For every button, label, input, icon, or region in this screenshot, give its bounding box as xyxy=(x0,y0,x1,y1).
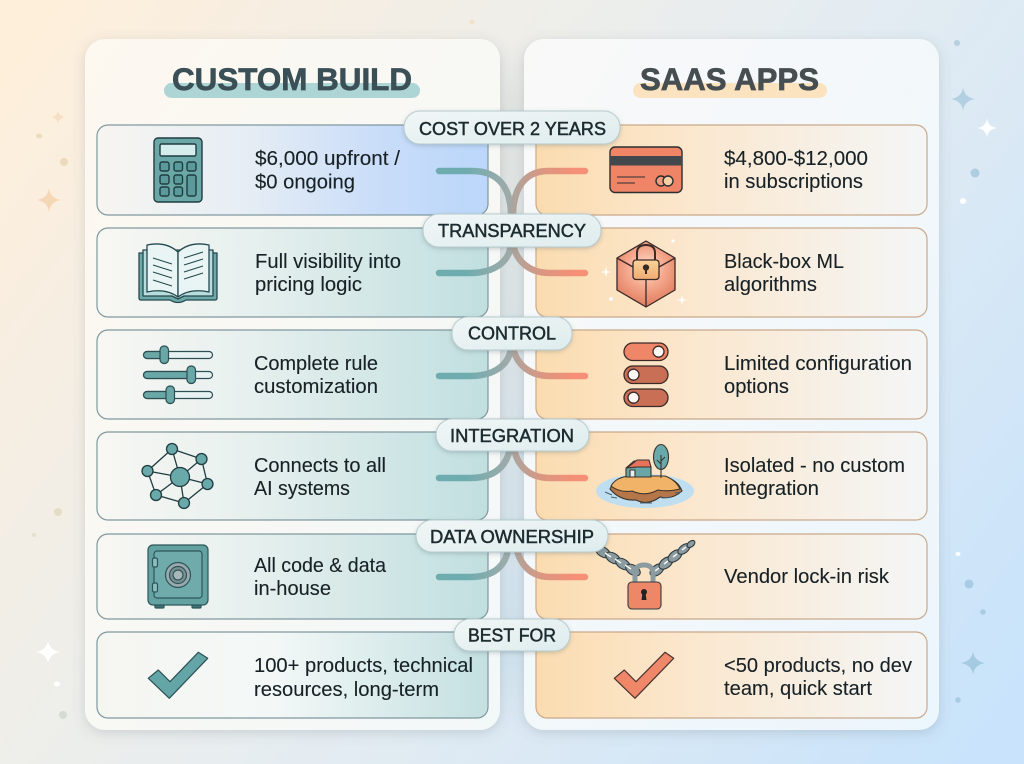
text: control saas: Limited configuration xyxy=(724,352,912,375)
text: integration saas: Isolated - no custom xyxy=(724,454,905,477)
row: control saas xyxy=(536,330,927,419)
text: control custom: Complete rule xyxy=(254,352,378,375)
text: transparency saas: algorithms xyxy=(724,273,817,296)
text: control custom: customization xyxy=(254,375,378,398)
pill: cost over 2 years: COST OVER 2 YEARS xyxy=(419,118,606,139)
pill: cost over 2 years xyxy=(404,111,620,144)
pill: control: CONTROL xyxy=(468,322,556,344)
row: transparency custom xyxy=(97,228,488,317)
text: transparency custom: Full visibility into xyxy=(255,250,401,273)
text: best for saas: team, quick start xyxy=(724,677,872,700)
icon: network xyxy=(142,444,213,508)
text: control saas: options xyxy=(724,375,789,398)
text: integration custom: AI systems xyxy=(254,477,350,500)
centre band xyxy=(498,39,526,730)
icon: teal check xyxy=(148,652,208,698)
pill: data ownership xyxy=(416,520,608,552)
icon: locked black box xyxy=(601,240,687,307)
row: integration saas xyxy=(536,432,927,520)
pill: transparency: TRANSPARENCY xyxy=(438,220,586,241)
text: data ownership saas: Vendor lock-in risk xyxy=(724,565,890,588)
pill: integration: INTEGRATION xyxy=(450,425,574,446)
text: best for custom: 100+ products, technical xyxy=(254,654,473,677)
text: integration saas: integration xyxy=(724,477,819,500)
row: integration custom xyxy=(97,432,488,520)
pill: data ownership: DATA OWNERSHIP xyxy=(430,526,594,547)
row: data ownership custom xyxy=(97,534,488,619)
panel: saas apps xyxy=(524,39,939,730)
heading: saas apps: SAAS APPS xyxy=(640,61,819,97)
pill: best for: BEST FOR xyxy=(468,624,556,646)
row: control custom xyxy=(97,330,488,419)
text: transparency custom: pricing logic xyxy=(255,273,362,296)
icon: sliders xyxy=(144,346,212,404)
row: cost custom xyxy=(97,125,488,215)
pill: control xyxy=(452,317,572,350)
row: best for custom xyxy=(97,632,488,718)
icon: safe xyxy=(148,545,208,608)
text: best for custom: resources, long-term xyxy=(254,678,439,701)
icon: coral check xyxy=(614,652,674,698)
text: cost custom: $6,000 upfront / xyxy=(255,147,400,170)
panel: custom build xyxy=(85,39,500,730)
icon: toggles xyxy=(624,343,668,406)
text: integration custom: Connects to all xyxy=(254,454,386,477)
text: data ownership custom: All code & data xyxy=(254,554,387,577)
icon: calculator xyxy=(154,138,202,202)
heading: custom build: CUSTOM BUILD xyxy=(172,61,412,97)
pill: transparency xyxy=(423,214,601,247)
icon: open book xyxy=(139,244,217,302)
text: data ownership custom: in-house xyxy=(254,577,331,600)
icon: island xyxy=(596,444,694,508)
text: cost saas: $4,800-$12,000 xyxy=(724,147,868,170)
connector curves xyxy=(439,171,585,577)
text: cost custom: $0 ongoing xyxy=(255,170,355,194)
text: best for saas: <50 products, no dev xyxy=(724,654,913,677)
icon: chain and padlock xyxy=(594,539,696,609)
icon: credit card xyxy=(610,147,682,192)
pill: best for xyxy=(454,619,570,651)
text: cost saas: in subscriptions xyxy=(724,170,863,193)
row: best for saas xyxy=(536,632,927,718)
row: data ownership saas xyxy=(536,534,927,619)
text: transparency saas: Black-box ML xyxy=(724,250,844,273)
row: transparency saas xyxy=(536,228,927,317)
pill: integration xyxy=(436,419,589,451)
row: cost saas xyxy=(536,125,927,215)
